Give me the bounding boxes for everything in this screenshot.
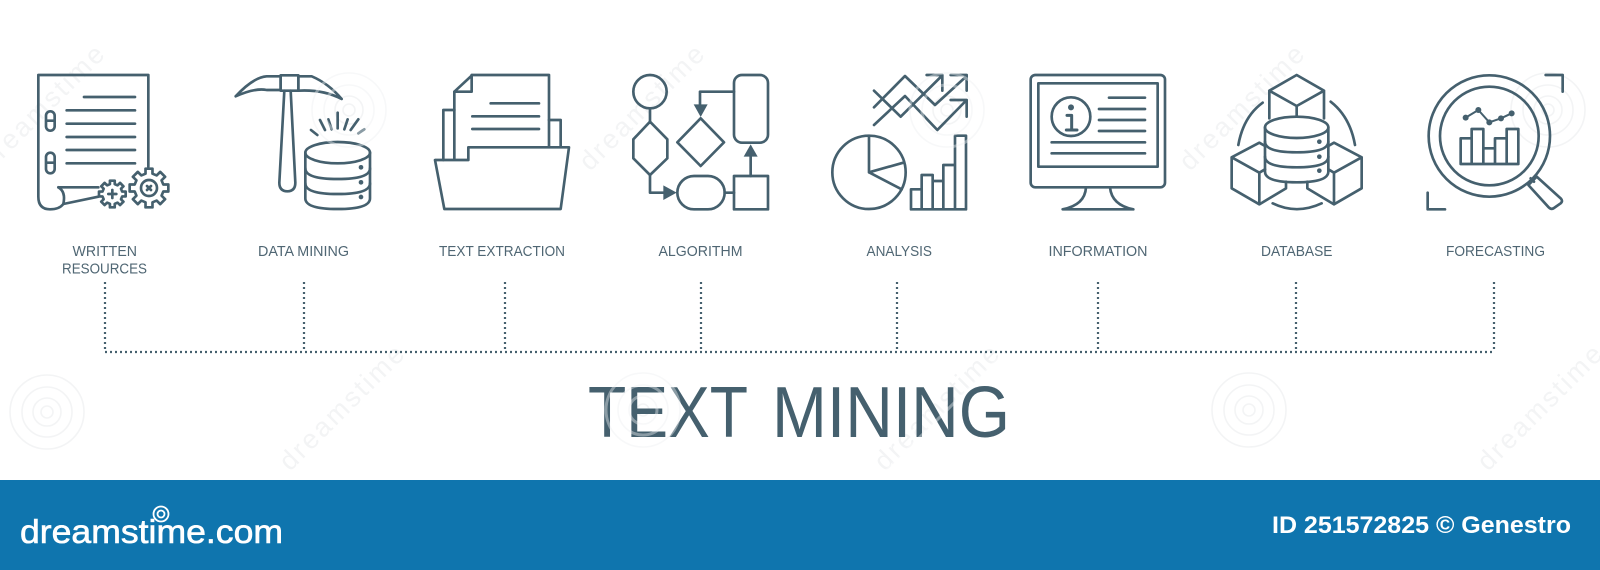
logo text: dreamstime.com <box>20 513 283 550</box>
icon: forecasting <box>1428 75 1563 209</box>
label: analysis: ANALYSIS <box>866 243 932 260</box>
label: written resources: WRITTEN <box>72 243 137 260</box>
icon: analysis <box>832 75 967 209</box>
label: information: INFORMATION <box>1048 243 1148 260</box>
logo spiral <box>154 506 168 522</box>
dotted connector tree <box>105 282 1495 352</box>
icon: text extraction <box>435 75 569 209</box>
label: data mining: DATA MINING <box>258 243 349 260</box>
label: written resources: RESOURCES <box>62 260 147 278</box>
watermark: spirals and diagonal text: dreamstime <box>573 38 711 176</box>
watermark: spirals and diagonal text: dreamstime <box>1173 38 1311 176</box>
image id and credit: ID 251572825 © Genestro <box>1272 512 1571 539</box>
title: TEXT <box>588 373 748 453</box>
icon: information <box>1031 75 1165 209</box>
label: forecasting: FORECASTING <box>1446 243 1545 260</box>
title <box>588 373 1010 453</box>
icon: written resources <box>38 75 168 209</box>
label: written resources <box>62 243 147 278</box>
icon: data mining <box>236 75 370 209</box>
title: MINING <box>772 373 1010 453</box>
watermark: spirals and diagonal text: dreamstime <box>868 338 1006 476</box>
watermark: spirals and diagonal text <box>0 38 1600 476</box>
label: algorithm: ALGORITHM <box>658 243 742 260</box>
icon: algorithm <box>633 75 768 209</box>
footer bar <box>0 480 1600 570</box>
label: database: DATABASE <box>1261 243 1332 260</box>
icon: database <box>1232 75 1362 209</box>
watermark: spirals and diagonal text: dreamstime <box>273 338 411 476</box>
label: text extraction: TEXT EXTRACTION <box>439 243 565 260</box>
watermark overlay on artwork <box>312 73 1005 472</box>
